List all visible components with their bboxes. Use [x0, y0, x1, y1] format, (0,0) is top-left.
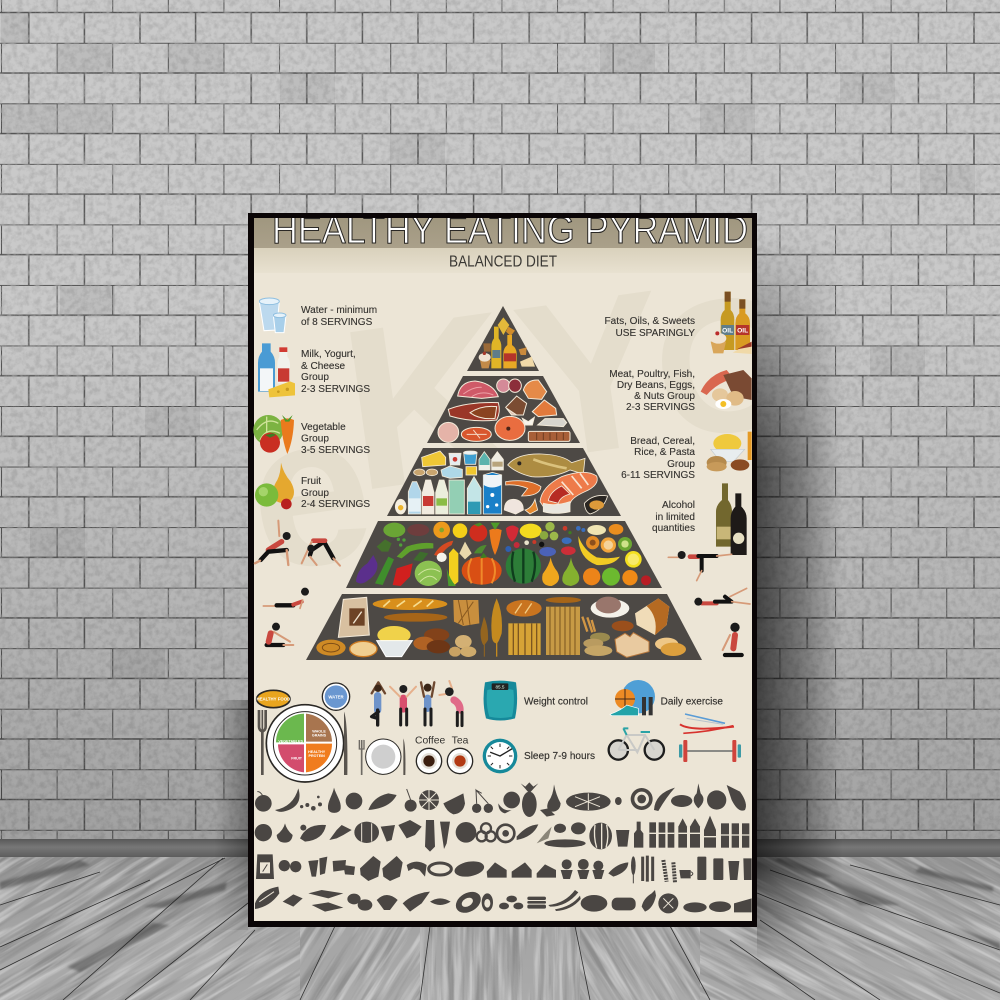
- icon: tea cup: [447, 748, 473, 774]
- figure: kneeling stretch: [723, 623, 742, 655]
- label: alcohol: quantities: [652, 523, 695, 534]
- watermark: O: [641, 251, 817, 481]
- icon: water badge: WATER: [328, 694, 345, 699]
- label: meat: 2-3 SERVINGS: [626, 402, 695, 413]
- label: milk: 2-3 SERVINGS: [301, 384, 370, 395]
- icon: sports equipment: [610, 680, 655, 716]
- icon: clock: [483, 739, 517, 773]
- label: alcohol: in limited: [655, 512, 695, 523]
- tier 3 foods: dairy and fish: [395, 451, 608, 514]
- label: bread: Bread, Cereal,: [630, 436, 695, 447]
- title band: [254, 218, 752, 248]
- label: bread: Rice, & Pasta: [634, 447, 695, 458]
- icon: ski poles and skis: [680, 714, 734, 733]
- segment: healthy protein: [306, 744, 332, 772]
- icon: healthy food badge: HEALTHY FOOD: [256, 697, 290, 702]
- label: water: Water - minimum: [301, 305, 377, 316]
- baseboard: [0, 839, 1000, 857]
- silhouette row 3: grains and sweets: [256, 854, 752, 883]
- tier 5: [306, 594, 702, 660]
- label: milk: Group: [301, 372, 329, 383]
- label: fats: USE SPARINGLY: [616, 328, 695, 339]
- tier 1 foods: fats and sweets: [479, 317, 535, 368]
- poster panel: [254, 218, 752, 921]
- icon: coffee cup: [416, 748, 442, 774]
- figure: cobra pose: [263, 588, 309, 608]
- label: tea: Tea: [452, 735, 469, 746]
- label: fruit: 2-4 SERVINGS: [301, 499, 370, 510]
- label: milk: Milk, Yogurt,: [301, 349, 356, 360]
- plate chart: PROTEIN: [309, 754, 325, 758]
- icon: fruit: [255, 463, 294, 509]
- figure: lunge with raised arm: [255, 521, 291, 565]
- tier 4: [346, 521, 662, 588]
- icon: oil bottles and sweets: [710, 292, 752, 354]
- icon: milk and cheese: [258, 343, 295, 397]
- icon: weighing scale: 85.5: [495, 685, 505, 690]
- subtitle: BALANCED DIET: [449, 254, 557, 270]
- label: meat: Dry Beans, Eggs,: [617, 380, 695, 391]
- yoga figures around the pyramid: [255, 521, 750, 655]
- icon: alcohol bottles: [716, 483, 747, 555]
- tier 2: [427, 376, 580, 443]
- pyramid: [306, 306, 702, 660]
- watermark: [260, 291, 752, 566]
- left serving labels: [301, 305, 377, 510]
- label: coffee: Coffee: [415, 735, 445, 746]
- segment: vegetables: [276, 714, 304, 742]
- label: fruit: Fruit: [301, 476, 321, 487]
- icon: fork: [259, 710, 266, 775]
- label: vegetable: 3-5 SERVINGS: [301, 445, 370, 456]
- poster cast shadow: [215, 230, 842, 960]
- figure: arms up pink: [390, 685, 416, 725]
- watermark: e: [234, 362, 386, 618]
- left food icons: [253, 298, 295, 509]
- label: weight control: Weight control: [524, 696, 588, 707]
- plate chart: [266, 705, 344, 782]
- figure: downward bend: [302, 541, 340, 566]
- icon: bread and cereal: [707, 432, 752, 471]
- right serving labels: [605, 316, 695, 534]
- figure: seated stretch: [267, 623, 293, 645]
- icon: meat and eggs: [701, 370, 752, 409]
- figure: side bend pink: [439, 681, 462, 726]
- figure: tree pose: [372, 682, 385, 725]
- icon: weighing scale: [484, 681, 517, 720]
- icon: water glasses: [259, 298, 286, 333]
- figure: warrior three: [668, 551, 732, 581]
- label: vegetable: Vegetable: [301, 422, 346, 433]
- icon: barbell: [679, 740, 741, 762]
- tier 5 foods: grains: [316, 597, 686, 657]
- tier 3: [387, 448, 621, 516]
- tier 1: [467, 306, 539, 371]
- plate chart: WHOLE: [312, 729, 326, 733]
- exercising figures: [372, 681, 462, 726]
- watermark: K: [328, 262, 528, 540]
- silhouette row 2: produce and dairy: [255, 816, 749, 852]
- plate chart: VEGETABLES: [278, 739, 303, 743]
- icon: oil bottles and sweets: OIL: [737, 328, 748, 335]
- plate chart: HEALTHY: [308, 750, 326, 754]
- icon: oil bottles and sweets: OIL: [722, 328, 733, 335]
- plate chart: FRUIT: [291, 757, 303, 761]
- plate chart: GRAINS: [312, 733, 327, 737]
- icon: water badge: [322, 683, 350, 710]
- label: sleep: Sleep 7-9 hours: [524, 751, 595, 762]
- label: fruit: Group: [301, 488, 329, 499]
- subtitle band: [254, 248, 752, 273]
- watermark: Y: [503, 243, 682, 507]
- lower health section: [256, 680, 741, 782]
- figure: prone leg raise: [694, 588, 750, 606]
- icon: vegetables: [253, 415, 294, 454]
- icon: small plate setting: [359, 738, 405, 775]
- icon: bicycle: [609, 728, 664, 760]
- title: HEALTHY EATING PYRAMID: [272, 208, 748, 252]
- label: meat: & Nuts Group: [634, 391, 695, 402]
- poster frame: [248, 213, 757, 927]
- label: meat: Meat, Poultry, Fish,: [609, 369, 695, 380]
- figure: arms up blue: [421, 682, 434, 725]
- silhouette row 4: fish, eggs and meat: [255, 887, 752, 917]
- segment: whole grains: [306, 714, 332, 742]
- label: alcohol: Alcohol: [662, 500, 695, 511]
- silhouette row 1: fruits and vegetables: [255, 782, 746, 817]
- label: fats: Fats, Oils, & Sweets: [605, 316, 695, 327]
- wooden floor: [0, 857, 1000, 1000]
- label: water: of 8 SERVINGS: [301, 317, 373, 328]
- icon: healthy food badge: [256, 690, 290, 708]
- right food icons: [701, 292, 752, 555]
- label: bread: 6-11 SERVINGS: [621, 470, 695, 481]
- label: vegetable: Group: [301, 434, 329, 444]
- tier 4 foods: fruits and vegetables: [356, 522, 651, 586]
- segment: fruit: [278, 744, 304, 772]
- icon: knife: [344, 712, 347, 775]
- label: milk: & Cheese: [301, 361, 346, 372]
- label: bread: Group: [667, 459, 695, 470]
- tier 2 foods: meat: [438, 379, 570, 442]
- label: daily exercise: Daily exercise: [661, 696, 723, 707]
